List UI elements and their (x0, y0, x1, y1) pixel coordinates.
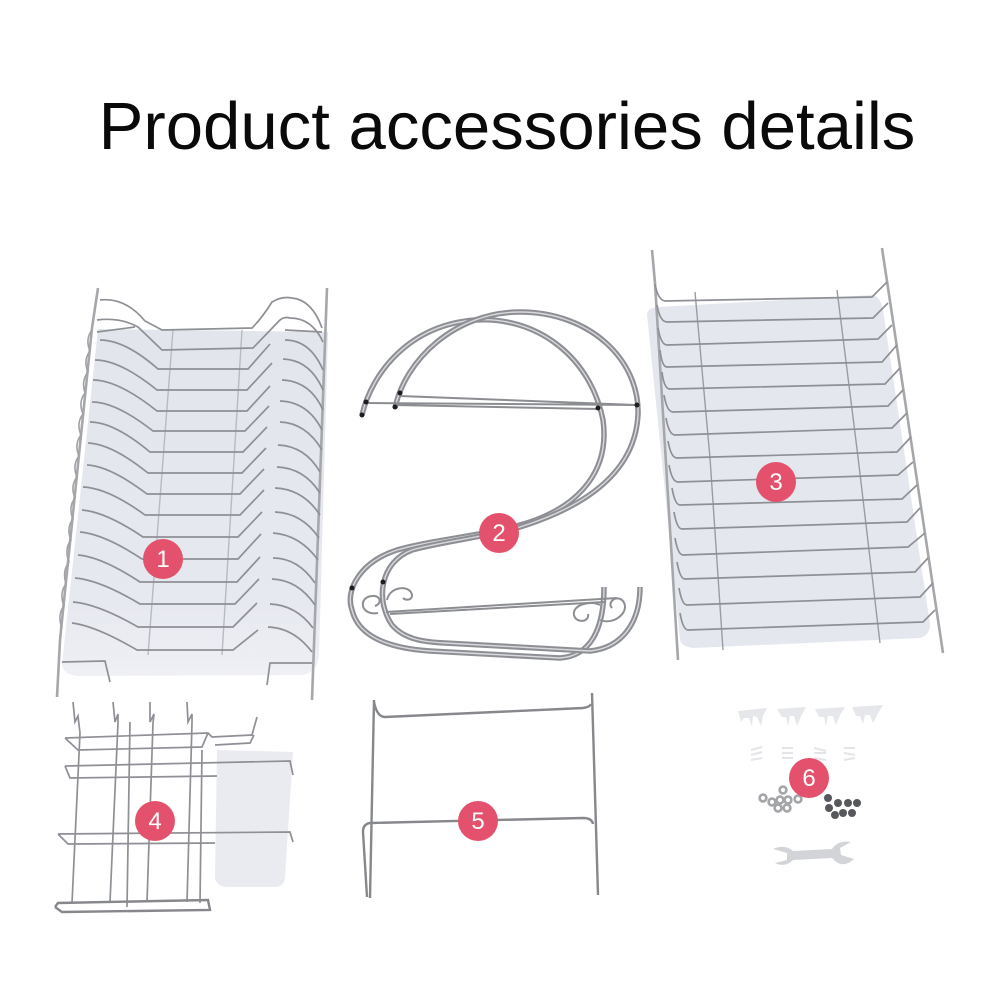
tray (647, 295, 930, 648)
badge 5: 5 (471, 808, 485, 835)
clips (738, 705, 883, 727)
part 2: curved side frame (350, 312, 640, 658)
part 6: hardware (738, 705, 883, 865)
wrench (773, 842, 854, 865)
badge 4: 4 (148, 808, 162, 835)
badge 4 (135, 801, 175, 841)
cup (215, 750, 293, 887)
badge 6 (789, 758, 829, 798)
part 3: flat rack (647, 248, 943, 660)
badge 3 (756, 462, 796, 502)
silver nuts (760, 787, 801, 811)
badge 1 (143, 539, 183, 579)
title: Product accessories details (99, 89, 915, 164)
tray (62, 329, 328, 676)
badge 2: 2 (492, 520, 506, 547)
badge 2 (479, 513, 519, 553)
badge 3: 3 (769, 469, 783, 496)
badge 6: 6 (802, 765, 816, 792)
part 1: plate rack (57, 288, 328, 700)
badge 5 (458, 801, 498, 841)
dark nuts (824, 794, 861, 819)
part 5: wire stand (363, 693, 598, 898)
badge 1: 1 (156, 546, 170, 573)
part 4: utensil holder (55, 702, 293, 912)
